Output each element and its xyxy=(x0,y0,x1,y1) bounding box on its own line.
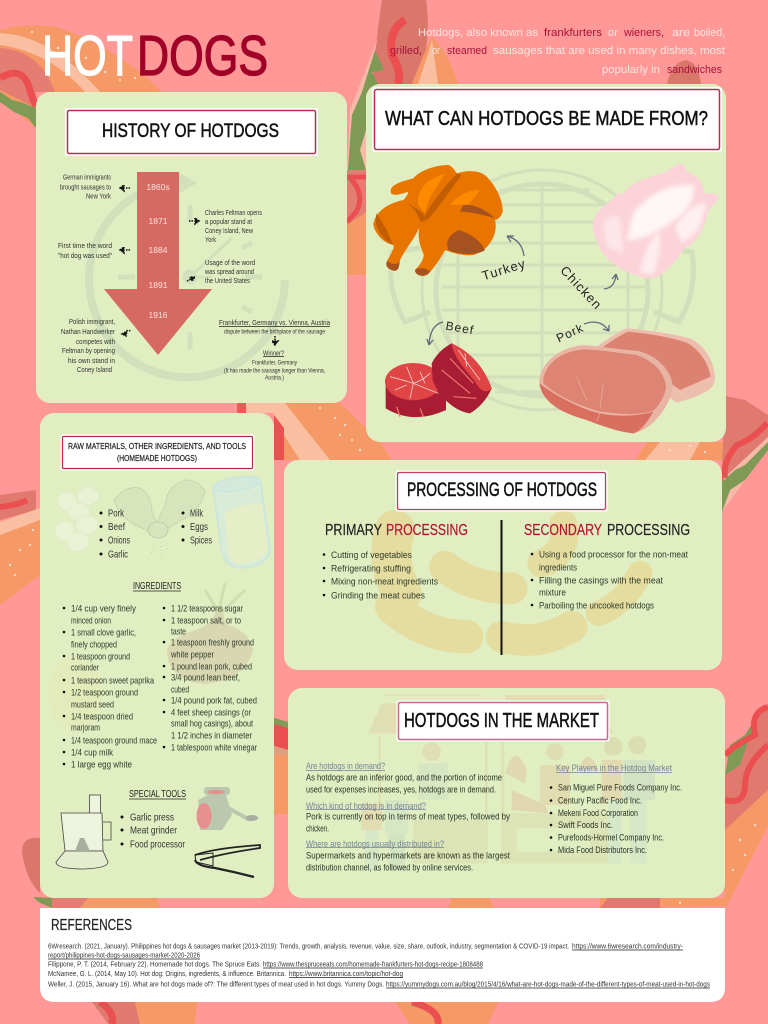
ingredients column two: 1/4 pound pork fat, cubed xyxy=(171,696,257,706)
ingredients column two: 1 1/2 teaspoons sugar xyxy=(171,604,243,614)
intro text: sandwiches xyxy=(667,64,722,76)
key players: Century Pacific Food Inc. xyxy=(558,796,642,806)
timeline arrow xyxy=(104,172,212,355)
ingredient list: Garlic xyxy=(108,548,128,560)
callout: frankfurter vs vienna: Frankfurter, Germany vs. Vienna, Austria xyxy=(219,318,331,327)
market questions: Where are hotdogs usually distributed in? xyxy=(306,839,444,849)
timeline notes right: Coney Island, New xyxy=(205,226,253,235)
intro text: boiled, xyxy=(694,27,725,39)
market questions: Which kind of hotdog is in demand? xyxy=(306,801,426,811)
timeline years: 1891 xyxy=(149,280,168,290)
primary processing xyxy=(323,522,468,602)
intro text: steamed xyxy=(447,45,487,57)
market questions: Pork is currently on top in terms of meat types, followed by xyxy=(306,812,510,822)
secondary processing xyxy=(524,522,690,612)
icon: chicken xyxy=(593,164,718,278)
intro text: frankfurters xyxy=(544,27,603,39)
ingredients column one: 1 large egg white xyxy=(71,760,132,770)
ingredient list xyxy=(100,508,212,560)
icon: beef xyxy=(385,343,492,417)
timeline notes right: the United States xyxy=(205,276,250,285)
intro text xyxy=(390,27,725,76)
ingredients column one: finely chopped xyxy=(71,640,117,650)
callout: frankfurter vs vienna xyxy=(219,318,331,382)
market questions: Are hotdogs in demand? xyxy=(306,761,385,771)
ingredients column one: marjoram xyxy=(71,722,100,734)
label: chicken: Chicken xyxy=(557,263,605,313)
intro text: popularly in xyxy=(602,64,660,76)
primary processing: Mixing non-meat ingredients xyxy=(331,576,438,588)
heading box xyxy=(396,700,610,742)
timeline notes left: Coney Island xyxy=(77,365,112,374)
ingredients column one: 1/2 teaspoon ground xyxy=(71,688,138,698)
primary processing: Refrigerating stuffing xyxy=(331,564,411,574)
timeline notes left: German immigrants xyxy=(63,172,111,182)
ingredients column two: taste xyxy=(171,626,186,638)
secondary processing: PROCESSING xyxy=(607,522,690,539)
panel: hotdogs in the market xyxy=(288,688,725,898)
timeline years: 1860s xyxy=(146,182,170,192)
icon: market stall watermark xyxy=(362,695,655,870)
ingredients column two: small hog casings), about xyxy=(171,718,253,730)
secondary processing: Parboiling the uncooked hotdogs xyxy=(539,600,654,612)
key players xyxy=(550,763,682,855)
heading box: WHAT CAN HOTDOGS BE MADE FROM? xyxy=(385,107,708,130)
key players: Mekeni Food Corporation xyxy=(558,808,638,818)
callout: frankfurter vs vienna: Austria.) xyxy=(265,374,284,382)
secondary processing: Using a food processor for the non-meat xyxy=(539,550,688,560)
reference list: Weller, J. (2015, January 16). What are hot dogs made of?: The different types of meat used in hot dogs. Yummy Dogs. xyxy=(48,982,384,988)
primary processing: PROCESSING xyxy=(386,522,468,539)
ingredients column one: mustard seed xyxy=(71,700,114,710)
reference list: https://yummydogs.com.au/blog/2015/4/16/what-are-hot-dogs-made-of-the-different-types-of-meat-used-in-hot-dogs xyxy=(386,982,710,988)
icon: pork xyxy=(539,328,715,433)
icon: garlic press xyxy=(195,845,260,877)
icon: onion watermark left xyxy=(48,655,102,731)
heading box: RAW MATERIALS, OTHER INGREDIENTS, AND TOOLS xyxy=(68,441,246,451)
heading: ingredients: INGREDIENTS xyxy=(133,581,181,592)
ingredients column two: 1 teaspoon freshly ground xyxy=(171,638,254,648)
reference list: https://www.6wresearch.com/industry- xyxy=(572,944,684,950)
timeline notes right: was spread around xyxy=(204,267,254,276)
heading: REFERENCES xyxy=(51,917,132,934)
primary processing: Grinding the meat cubes xyxy=(331,590,425,602)
key players: Mida Food Distributors Inc. xyxy=(558,845,647,855)
heading box xyxy=(372,87,722,152)
heading box xyxy=(60,434,254,470)
special tools list xyxy=(120,812,185,850)
label: pork: Pork xyxy=(554,321,586,345)
timeline notes left: Polish immigrant, xyxy=(69,317,115,326)
divider xyxy=(500,520,502,655)
reference list xyxy=(48,944,710,988)
timeline notes left xyxy=(58,172,115,374)
secondary processing: mixture xyxy=(539,588,566,598)
ingredients column one: 1/4 teaspoon ground mace xyxy=(71,736,157,746)
ingredient list: Eggs xyxy=(190,521,208,533)
ingredients column two: 3/4 pound lean beef, xyxy=(171,672,240,684)
icon: onion watermark right xyxy=(167,583,253,684)
ingredients column two: 1 teaspoon salt, or to xyxy=(171,616,241,626)
title xyxy=(42,24,268,88)
icon: garlic cloves xyxy=(55,487,99,552)
key players: San Miguel Pure Foods Company Inc. xyxy=(558,782,682,792)
ingredient list: Pork xyxy=(108,508,125,520)
icon: meat grinder xyxy=(196,787,258,830)
timeline years xyxy=(146,182,170,320)
ingredients column two: 1 1/2 inches in diameter xyxy=(171,730,252,742)
market questions: As hotdogs are an inferior good, and the portion of income xyxy=(306,772,502,782)
key players: Swift Foods Inc. xyxy=(558,820,613,830)
icon: clock watermark xyxy=(89,172,285,377)
panel: history of hotdogs xyxy=(36,92,347,403)
market questions: used for expenses increases, yes, hotdogs are in demand. xyxy=(306,784,496,794)
callout: frankfurter vs vienna: dispute between the birthplace of the sausage xyxy=(224,328,325,336)
ingredients column two: 1 tablespoon white vinegar xyxy=(171,742,257,754)
timeline notes left: brought sausages to xyxy=(60,182,111,192)
icon: steamer watermark xyxy=(391,170,693,410)
icon: glass of milk xyxy=(212,474,270,568)
key players: Key Players in the Hotdog Market xyxy=(556,763,672,773)
reference list: 6Wresearch. (2021, January). Philippines hot dogs & sausages market (2013-2019): Trends, growth, analysis, revenue, value, size, share, outlook, industry, segmentation & COVID-19 impact. xyxy=(48,944,569,950)
heading: special tools: SPECIAL TOOLS xyxy=(129,789,186,800)
ingredients column one xyxy=(63,604,157,770)
timeline notes right: Charles Feltman opens xyxy=(205,208,262,217)
timeline years: 1916 xyxy=(149,310,168,320)
timeline notes right: Usage of the word xyxy=(205,258,255,267)
panel: what can hotdogs be made from xyxy=(366,84,726,442)
secondary processing: SECONDARY xyxy=(524,522,602,539)
panel: raw materials xyxy=(40,413,274,898)
ingredients column one: 1/4 teaspoon dried xyxy=(71,712,133,722)
ingredients column two: 4 feet sheep casings (or xyxy=(171,708,251,718)
reference list: report/philippines-hot-dogs-sausages-market-2020-2026 xyxy=(48,952,200,960)
heading box xyxy=(65,108,318,156)
icon: sausages watermark xyxy=(391,525,640,640)
intro text: are xyxy=(672,27,690,39)
ingredients column one: 1 small clove garlic, xyxy=(71,628,136,638)
ingredients column one: 1/4 cup milk xyxy=(71,748,113,758)
icon: turkey xyxy=(373,165,503,276)
timeline notes left: "hot dog was used" xyxy=(58,251,112,260)
label: beef: Beef xyxy=(445,319,475,337)
panel: references xyxy=(40,908,725,1002)
timeline notes right: York xyxy=(205,235,216,244)
intro text: grilled, xyxy=(390,45,422,57)
ingredients column one: 1 teaspoon ground xyxy=(71,652,130,662)
special tools list: Food processor xyxy=(130,838,185,850)
icon: salt and pepper shakers xyxy=(114,480,205,560)
ingredients column one: minced onion xyxy=(71,616,111,626)
ingredients column two: cubed xyxy=(171,684,189,696)
timeline notes right xyxy=(204,208,262,285)
intro text: Hotdogs, also known as xyxy=(418,27,539,39)
label: turkey: Turkey xyxy=(480,256,528,283)
timeline notes left: competes with xyxy=(76,337,115,346)
ingredients column two xyxy=(163,604,257,754)
special tools list: Garlic press xyxy=(130,812,174,824)
reference list: https://www.thespruceeats.com/homemade-frankfurters-hot-dogs-recipe-1808488 xyxy=(263,962,483,968)
icon: food processor xyxy=(56,795,111,869)
intro text: or xyxy=(608,27,618,39)
timeline notes left: Nathan Handwerker xyxy=(61,327,115,336)
heading box: (HOMEMADE HOTDOGS) xyxy=(117,453,197,463)
intro text: or xyxy=(432,45,440,57)
secondary processing: Filling the casings with the meat xyxy=(539,576,663,586)
ingredients column one: 1/4 cup very finely xyxy=(71,604,136,614)
ingredient list: Spices xyxy=(190,534,212,546)
timeline years: 1871 xyxy=(149,216,168,226)
dotted arrows xyxy=(120,185,278,345)
reference list: https://www.britannica.com/topic/hot-dog xyxy=(289,971,403,978)
callout: frankfurter vs vienna: Frankfurter, Germany xyxy=(252,360,298,366)
timeline notes left: Feltman by opening xyxy=(62,346,115,355)
callout: frankfurter vs vienna: Winner? xyxy=(263,348,284,358)
ingredients column two: 1 pound lean pork, cubed xyxy=(171,662,252,672)
intro text: wieners, xyxy=(623,27,664,39)
primary processing: Cutting of vegetables xyxy=(331,550,412,561)
market questions xyxy=(306,761,510,872)
heading box: HISTORY OF HOTDOGS xyxy=(102,121,279,142)
timeline notes left: New York xyxy=(86,192,111,200)
timeline years: 1884 xyxy=(149,245,168,255)
heading box: HOTDOGS IN THE MARKET xyxy=(404,710,599,732)
timeline notes left: First time the word xyxy=(58,241,112,250)
secondary processing: ingredients xyxy=(539,562,577,574)
title: HOT xyxy=(42,24,133,88)
heading box xyxy=(396,470,608,512)
curved arrows xyxy=(427,236,618,345)
primary processing: PRIMARY xyxy=(325,522,382,539)
key players: Purefoods-Hormel Company Inc. xyxy=(558,832,664,842)
timeline notes left: his own stand in xyxy=(68,356,115,365)
ingredients column two: white pepper xyxy=(170,650,214,660)
intro text: sausages that are used in many dishes, most xyxy=(493,45,725,57)
market questions: distribution channel, as followed by online services. xyxy=(306,862,473,872)
heading box: PROCESSING OF HOTDOGS xyxy=(407,479,597,501)
panel: processing of hotdogs xyxy=(284,460,722,670)
ingredient list: Milk xyxy=(190,508,204,520)
ingredients column one: coriander xyxy=(71,662,99,674)
ingredients column one: 1 teaspoon sweet paprika xyxy=(71,676,155,686)
reference list: McNamee, G. L. (2014, May 10). Hot dog: Origins, ingredients, & influence. Britannica. xyxy=(48,971,286,978)
timeline notes right: a popular stand at xyxy=(205,217,253,226)
market questions: Supermarkets and hypermarkets are known as the largest xyxy=(306,850,510,860)
market questions: chicken. xyxy=(306,824,329,834)
ingredient list: Onions xyxy=(108,534,130,546)
callout: frankfurter vs vienna: (It has made the sausage longer than Vienna, xyxy=(224,368,325,374)
ingredient list: Beef xyxy=(108,521,125,533)
title: DOGS xyxy=(137,24,268,88)
special tools list: Meat grinder xyxy=(130,824,177,836)
reference list: Filippone, P. T. (2014, February 22). Homemade hot dogs. The Spruce Eats. xyxy=(48,962,261,968)
